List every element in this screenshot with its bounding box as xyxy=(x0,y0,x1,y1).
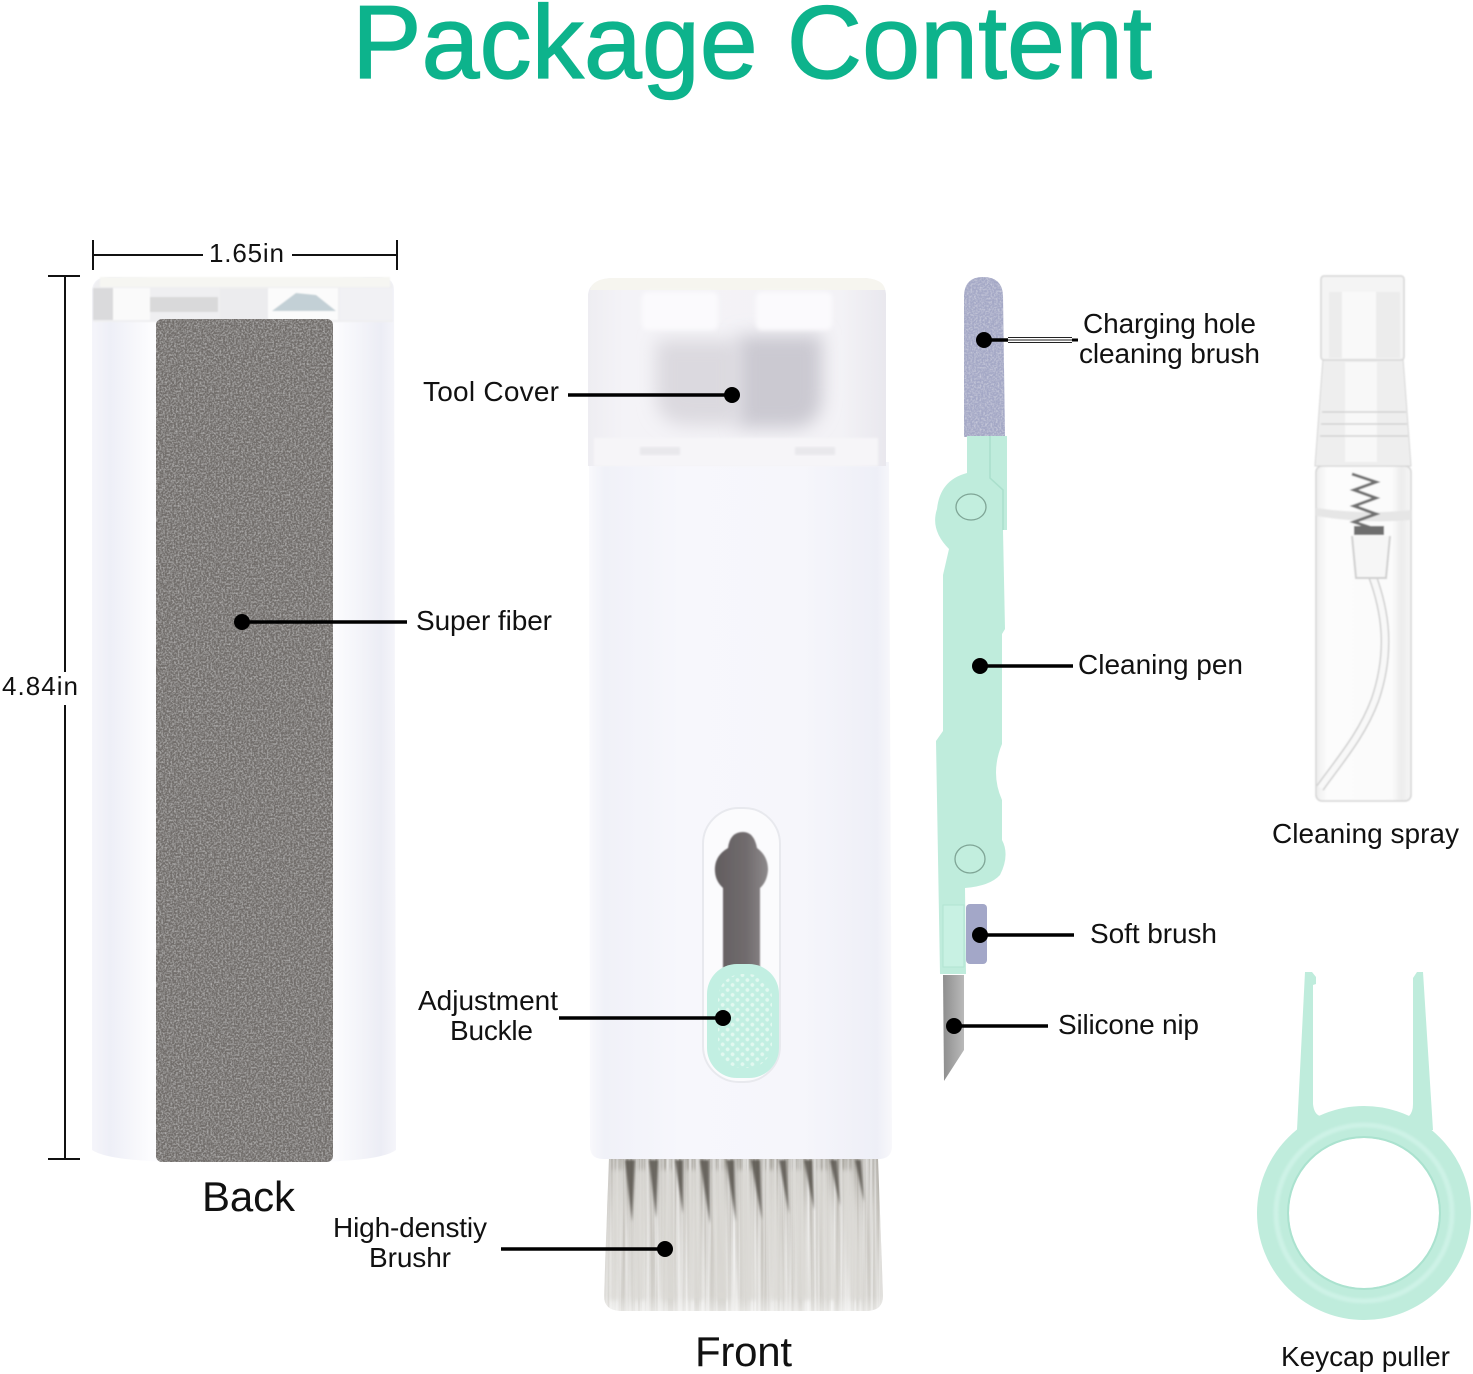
slider track xyxy=(703,808,780,1082)
label: super fiber: Super fiber xyxy=(416,605,552,636)
label: back: Back xyxy=(202,1173,296,1220)
super fiber pad xyxy=(156,319,333,1162)
white body xyxy=(589,462,892,1159)
charging hole brush tip xyxy=(964,277,1005,437)
soft brush head xyxy=(966,904,987,964)
spring xyxy=(1352,474,1378,530)
label: cleaning spray: Cleaning spray xyxy=(1272,818,1459,849)
label: high-density brush xyxy=(333,1212,673,1273)
label: keycap puller: Keycap puller xyxy=(1281,1341,1450,1372)
width dimension: 1.65in: 1.65in xyxy=(209,238,284,268)
translucent tool cover xyxy=(588,278,886,466)
height dimension: 4.84in: 4.84in xyxy=(2,671,78,701)
panel: front of cleaning case xyxy=(588,278,892,1311)
silicone nip blade xyxy=(943,975,964,1081)
panel: keycap puller xyxy=(1273,972,1455,1304)
label: tool cover: Tool Cover xyxy=(423,376,559,407)
label: charging hole cleaning brush: cleaning brush xyxy=(1079,338,1260,369)
panel: cleaning pen xyxy=(935,277,1007,1081)
brush bristles xyxy=(604,1158,883,1311)
label: cleaning pen xyxy=(972,649,1243,680)
label: cleaning pen: Cleaning pen xyxy=(1078,649,1243,680)
label: super fiber xyxy=(234,605,552,636)
collar xyxy=(1315,358,1411,466)
bottle xyxy=(1316,466,1411,801)
dip tube xyxy=(1320,575,1385,788)
label: soft brush: Soft brush xyxy=(1090,918,1217,949)
width dimension: 1.65in xyxy=(93,238,397,270)
label: adjustment buckle: Adjustment xyxy=(418,985,558,1016)
label: tool cover xyxy=(423,376,740,407)
label: adjustment buckle xyxy=(418,985,731,1046)
label: high-density brush: High-denstiy xyxy=(333,1212,487,1243)
label: silicone nip: Silicone nip xyxy=(1058,1009,1199,1040)
panel: cleaning spray bottle xyxy=(1315,276,1411,801)
label: front: Front xyxy=(695,1328,792,1374)
height dimension: 4.84in xyxy=(2,276,80,1159)
pen body xyxy=(935,436,1007,974)
label: silicone nip xyxy=(946,1009,1199,1040)
label: soft brush xyxy=(972,918,1217,949)
label: charging hole cleaning brush: Charging hole xyxy=(1083,308,1256,339)
metal scraper xyxy=(715,832,768,968)
label: adjustment buckle: Buckle xyxy=(450,1015,533,1046)
panel: back of cleaning case xyxy=(92,277,396,1162)
adjustment buckle xyxy=(707,964,779,1078)
label: high-density brush: Brushr xyxy=(369,1242,451,1273)
label: charging hole cleaning brush xyxy=(976,308,1260,369)
cap xyxy=(1321,276,1404,360)
